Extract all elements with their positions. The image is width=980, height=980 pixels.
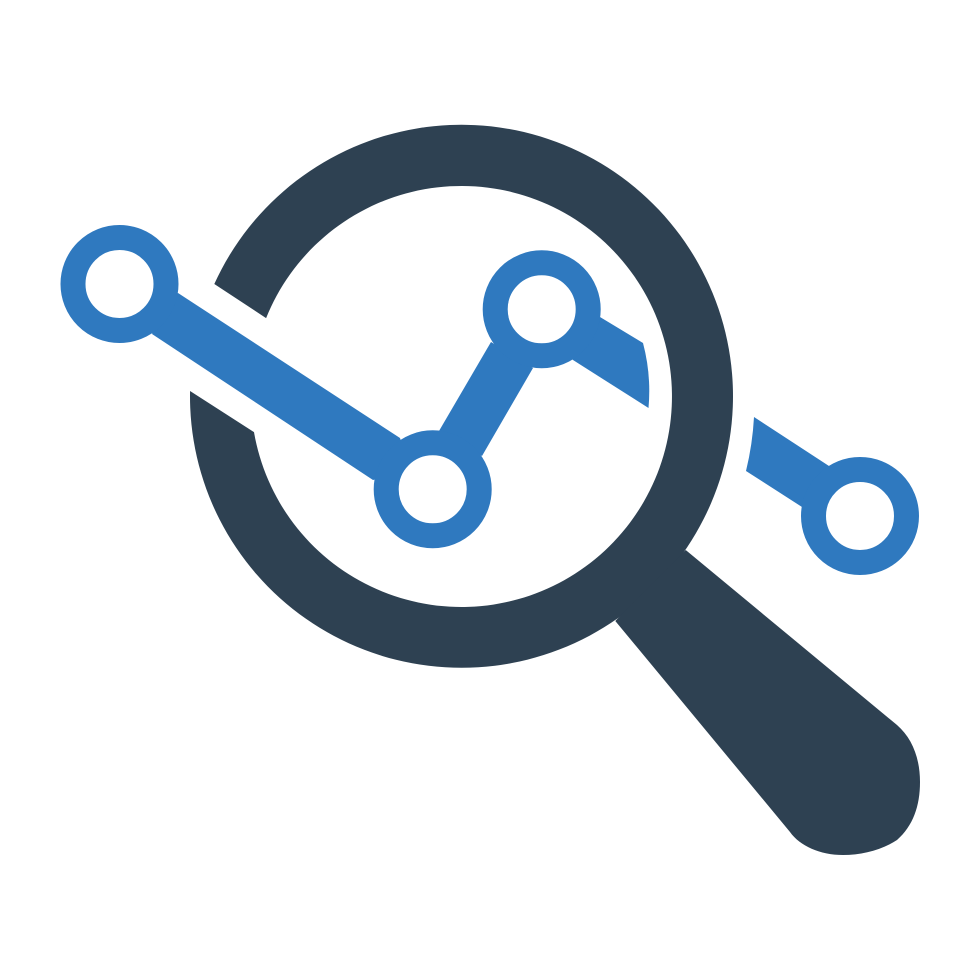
chart node 1 — [73, 238, 166, 330]
chart node 3 — [495, 263, 588, 356]
line chart — [73, 238, 906, 562]
chart segment: outside lens to last node — [746, 417, 840, 507]
lens ring — [190, 125, 733, 668]
chart segment: first node to second node — [152, 293, 410, 480]
handle — [615, 550, 920, 855]
chart node 4 — [814, 470, 906, 562]
chart node 2 — [386, 443, 479, 536]
chart segment: second node to third node — [439, 342, 533, 456]
magnifying glass — [190, 125, 920, 855]
chart segment: third node to lens edge — [550, 317, 649, 408]
